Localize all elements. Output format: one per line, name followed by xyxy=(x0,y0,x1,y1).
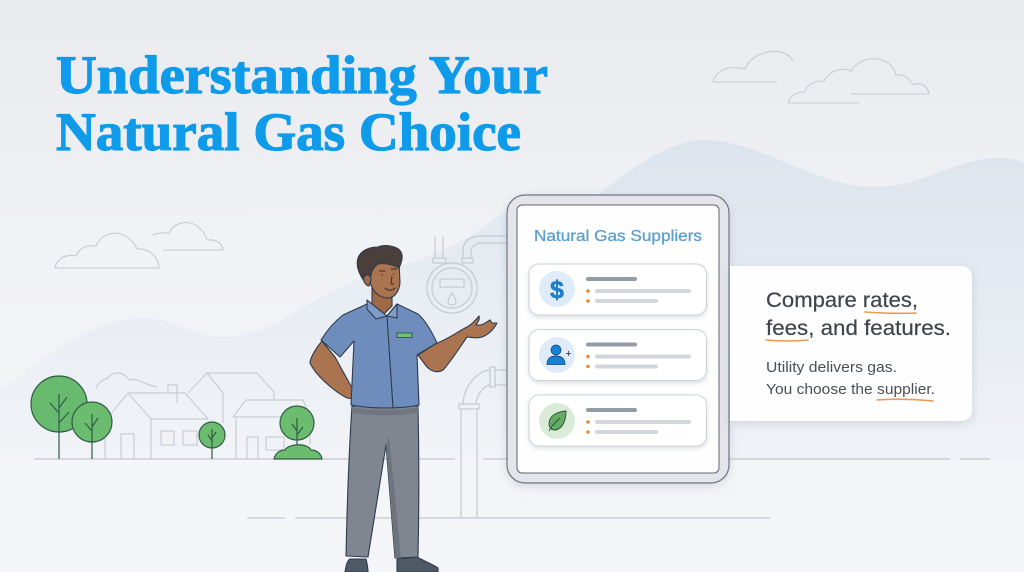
supplier card: green xyxy=(529,395,706,446)
icon: dollar: $ xyxy=(550,276,564,304)
clouds: left xyxy=(55,223,223,268)
supplier card: rates xyxy=(529,264,706,315)
icon: add person xyxy=(539,337,575,373)
trousers xyxy=(346,406,419,558)
tablet screen xyxy=(517,205,719,473)
tree 1 xyxy=(31,376,87,459)
orange underlines xyxy=(766,312,933,401)
name badge xyxy=(397,333,412,338)
right arm xyxy=(418,316,497,372)
shoes xyxy=(345,557,438,572)
callout body xyxy=(766,360,935,398)
callout xyxy=(730,266,972,421)
title: Understanding Your xyxy=(56,45,548,105)
clouds: top right xyxy=(713,51,929,103)
title xyxy=(56,45,548,162)
callout panel xyxy=(730,266,972,421)
left hand fingers xyxy=(354,388,366,393)
trees xyxy=(31,376,322,459)
houses xyxy=(96,373,310,459)
tablet heading: Natural Gas Suppliers xyxy=(534,228,702,245)
callout body: You choose the supplier. xyxy=(766,382,935,398)
face xyxy=(379,269,397,290)
shirt collar xyxy=(367,300,397,319)
hair xyxy=(357,246,402,286)
title: Natural Gas Choice xyxy=(56,102,521,162)
icon: leaf xyxy=(539,403,575,439)
lower pipe xyxy=(459,367,507,518)
tree 4 with bush xyxy=(274,406,322,459)
tablet frame xyxy=(507,195,729,483)
callout body: Utility delivers gas. xyxy=(766,360,897,376)
callout heading: Compare rates, xyxy=(766,289,918,312)
person xyxy=(310,246,497,572)
ground lines xyxy=(34,459,990,518)
callout heading: fees, and features. xyxy=(766,317,951,340)
left arm xyxy=(310,341,370,399)
tree 2 xyxy=(72,402,112,459)
tree 3 xyxy=(199,422,225,459)
background hills xyxy=(0,140,1024,459)
icon: dollar xyxy=(539,271,575,307)
ground xyxy=(0,459,1024,572)
supplier card: person xyxy=(529,330,706,380)
neck xyxy=(372,288,392,316)
shirt placket xyxy=(387,316,393,408)
gas meter and upper pipes xyxy=(427,236,507,313)
ear xyxy=(364,275,371,286)
head xyxy=(369,256,400,298)
callout heading xyxy=(766,289,951,340)
shirt xyxy=(321,304,437,408)
tablet xyxy=(507,195,729,483)
